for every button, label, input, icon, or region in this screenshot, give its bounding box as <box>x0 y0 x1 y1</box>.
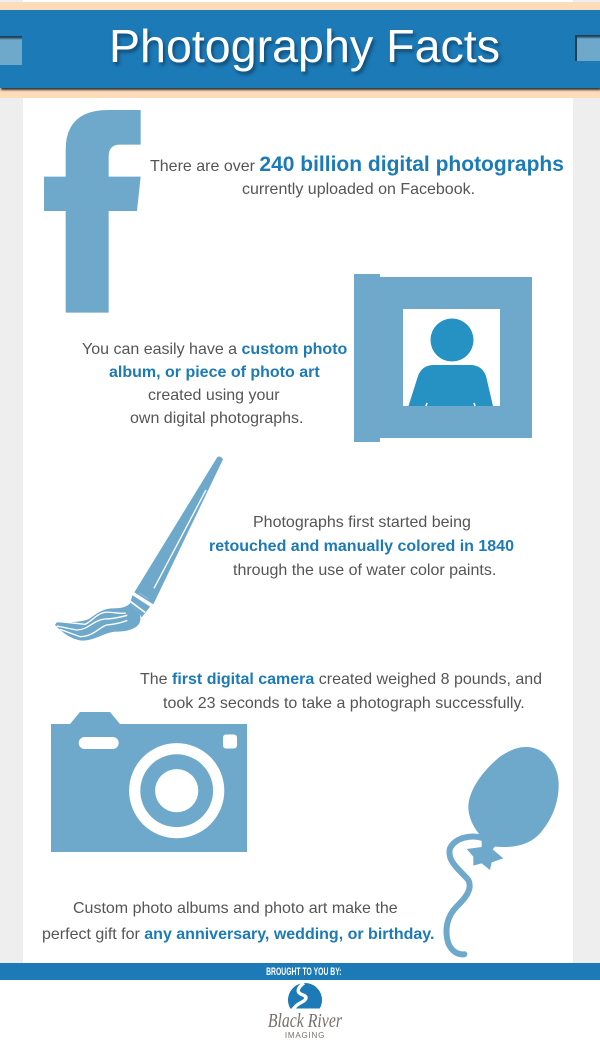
fact 1 text <box>150 153 564 198</box>
fact 2 text: album, or piece of photo art <box>109 364 320 381</box>
title: Photography Facts <box>109 20 500 72</box>
fact 3 text: Photographs first started being <box>253 514 471 531</box>
fact 3 text: retouched and manually colored in 1840 <box>209 538 514 555</box>
logo: Black River Imaging: Black River <box>268 1010 342 1032</box>
header banner <box>0 10 600 88</box>
footer bar: BROUGHT TO YOU BY: <box>266 966 342 978</box>
icon: facebook f <box>44 110 141 313</box>
footer bar <box>0 963 600 980</box>
fact 2 text: own digital photographs. <box>130 410 303 427</box>
header peach band <box>0 2 600 98</box>
fact 1 text: currently uploaded on Facebook. <box>242 181 475 198</box>
fact 5 text <box>42 900 434 943</box>
icon: paint brush <box>55 456 223 641</box>
icon: camera <box>51 712 247 852</box>
fact 4 text: The first digital camera created weighed 8 pounds, and <box>140 671 542 688</box>
fact 3 text <box>209 514 514 579</box>
left ribbon tab <box>0 36 22 65</box>
fact 5 text: Custom photo albums and photo art make the <box>73 900 398 917</box>
fact 5 text: perfect gift for any anniversary, wedding, or birthday. <box>42 926 434 943</box>
fact 2 text <box>82 341 347 427</box>
fact 3 text: through the use of water color paints. <box>233 562 496 579</box>
logo: Black River Imaging: IMAGING <box>285 1031 325 1040</box>
fact 4 text: took 23 seconds to take a photograph successfully. <box>163 695 525 712</box>
logo: Black River Imaging <box>268 983 342 1040</box>
icon: photo frame <box>354 274 532 442</box>
fact 2 text: You can easily have a custom photo <box>82 341 347 358</box>
fact 2 text: created using your <box>148 387 280 404</box>
fact 1 text: There are over 240 billion digital photographs <box>150 153 564 176</box>
icon: balloon <box>446 747 559 954</box>
right ribbon tab <box>575 35 600 61</box>
fact 4 text <box>140 671 542 712</box>
